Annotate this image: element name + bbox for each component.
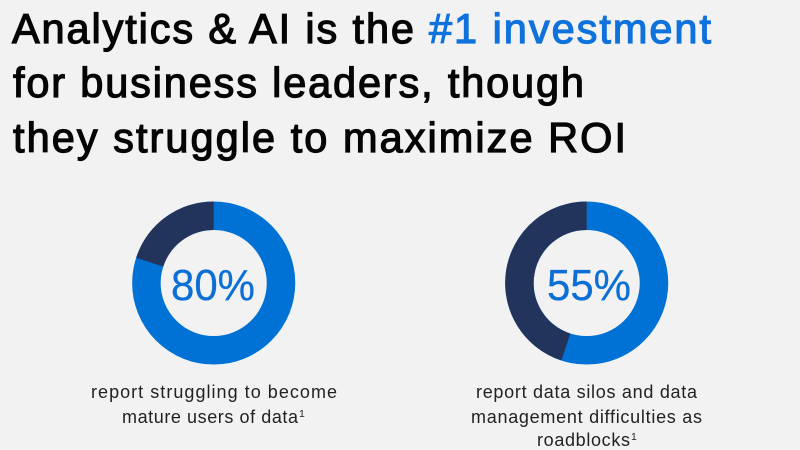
panel: 55% stat bbox=[471, 216, 702, 450]
caption: 80%: mature users of data bbox=[122, 407, 299, 427]
title: they struggle to maximize ROI bbox=[13, 114, 626, 161]
panel: 80% stat bbox=[91, 216, 337, 427]
caption: 80%: report struggling to become bbox=[91, 382, 337, 402]
title: Analytics & AI is the bbox=[12, 5, 414, 52]
title: for business leaders, though bbox=[13, 59, 584, 106]
caption: 55% bbox=[471, 382, 702, 450]
donut chart: 80% bbox=[146, 216, 281, 350]
value: 55%: 55% bbox=[547, 261, 631, 310]
caption: 55%: management difficulties as bbox=[471, 407, 702, 427]
title highlight: #1 investment bbox=[429, 5, 711, 52]
caption: 80%: 1 bbox=[299, 408, 305, 420]
value: 80%: 80% bbox=[171, 261, 255, 310]
donut chart: 55% bbox=[519, 216, 654, 350]
caption: 55%: report data silos and data bbox=[476, 382, 698, 402]
caption: 55%: 1 bbox=[631, 431, 637, 443]
caption: 55%: roadblocks bbox=[537, 430, 630, 450]
title bbox=[12, 5, 711, 161]
caption: 80% bbox=[91, 382, 337, 427]
